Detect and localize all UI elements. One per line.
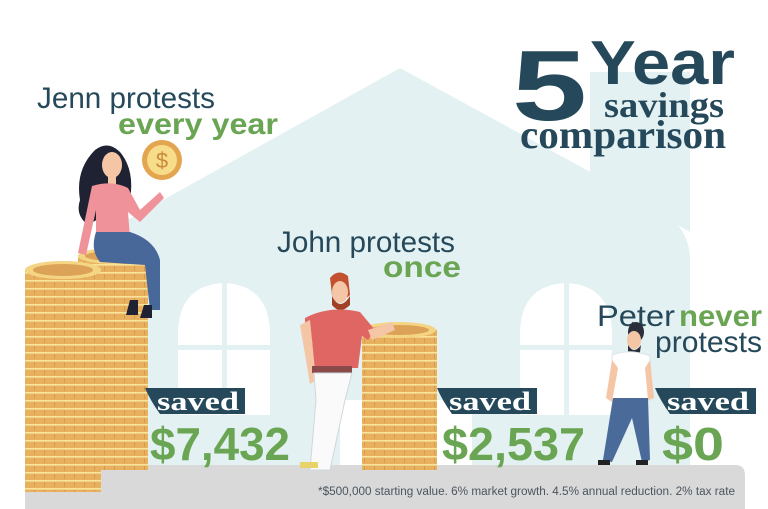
footnote: *$500,000 starting value. 6% market growth. 4.5% annual reduction. 2% tax rate <box>318 486 735 498</box>
saved label 1: $7,432 <box>150 418 290 470</box>
John heading: John protests <box>277 226 455 259</box>
icon: dollar coin <box>142 140 182 180</box>
title <box>512 29 735 157</box>
saved label 1 <box>145 387 290 470</box>
Peter figure <box>598 322 654 465</box>
saved label 2: saved <box>449 387 532 416</box>
title: savings <box>604 85 724 125</box>
Jenn heading <box>37 82 278 141</box>
John heading <box>277 226 461 284</box>
saved label 3: $0 <box>662 418 724 470</box>
icon: dollar coin: $ <box>156 148 168 173</box>
John heading: once <box>383 251 461 284</box>
saved label 3: saved <box>667 387 750 416</box>
Jenn heading: every year <box>118 108 278 141</box>
saved label 1: saved <box>157 387 240 416</box>
saved label 3 <box>655 387 756 470</box>
Peter heading: Peter <box>597 300 675 333</box>
saved label 2 <box>437 387 585 470</box>
floor <box>25 465 745 509</box>
John figure <box>300 272 395 470</box>
saved label 2: $2,537 <box>442 418 585 470</box>
John coin stack <box>362 322 437 470</box>
title: comparison <box>520 112 726 157</box>
Jenn heading: Jenn protests <box>37 82 215 115</box>
Peter heading <box>597 300 762 359</box>
coin stacks Jenn <box>25 248 148 492</box>
Peter heading: never <box>679 300 762 333</box>
title: Year <box>590 29 735 98</box>
Peter heading: protests <box>655 326 762 359</box>
title: 5 <box>512 30 587 142</box>
house background <box>118 68 690 466</box>
Jenn figure <box>78 145 164 318</box>
